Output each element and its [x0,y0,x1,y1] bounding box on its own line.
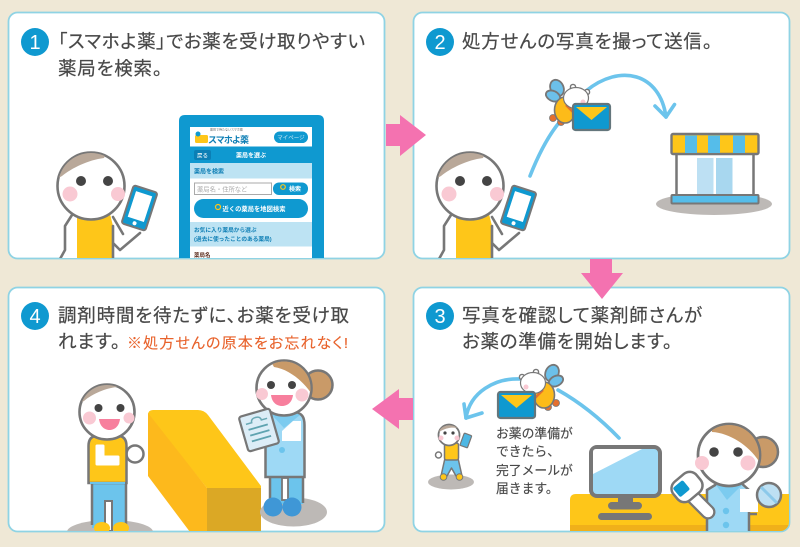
counter [148,410,261,532]
warning note: ※処方せんの原本をお忘れなく! [127,335,348,352]
step number 4 [21,302,49,330]
step number 2 [426,28,454,56]
step number 3 [426,302,454,330]
panel 4: receive medicine: れます。 [58,331,120,352]
arrow: step 2 to 3 [581,259,623,299]
step number 2: 2 [434,32,446,54]
panel 1: search pharmacy [8,12,384,260]
pharmacy building [656,134,772,215]
step number 1 [21,28,49,56]
heading 1: 「スマホよ薬」でお薬を受け取りやすい [58,31,365,52]
smartphone screen mockup: (過去に使ったことのある薬局) [194,235,272,243]
heading 3: 写真を確認して薬剤師さんが [462,305,702,326]
smartphone screen mockup: 近くの薬局を地図検索 [223,204,285,213]
person with smartphone [55,145,158,260]
computer monitor [591,447,660,520]
desk [570,494,790,532]
smartphone screen mockup: 薬局を検索 [194,168,224,176]
bee carrying envelope [519,363,565,410]
envelope [498,392,535,418]
panel 2: send prescription photo [414,12,790,260]
logo [195,128,249,144]
envelope [573,104,610,130]
arrow curve to pharmacy [530,75,674,176]
panel 4: receive medicine [8,288,384,544]
heading 2: 処方せんの写真を撮って送信。 [462,31,712,52]
logo: 薬局で待たないスマホ薬 [210,126,243,132]
arrow: step 3 to 4 [372,389,413,429]
smartphone screen mockup [179,115,324,259]
smartphone screen mockup: 薬局名 [194,251,211,259]
smartphone screen mockup: 戻る [197,152,208,160]
heading 1: 薬局を検索。 [58,58,162,79]
smartphone screen mockup: 薬局名・住所など [197,184,248,194]
step number 4: 4 [29,306,41,328]
person with smartphone [434,145,537,260]
small patient figure [428,424,474,490]
patient smiling [67,383,153,531]
clipboard [239,408,279,452]
panel 3: pharmacist confirms [414,288,790,535]
mail notification text: 届きます。 [496,481,559,496]
arrow curve to patient [464,379,619,438]
smartphone screen mockup: マイページ [277,134,305,142]
logo: スマホよ薬 [208,134,249,145]
arrow: step 1 to 2 [386,115,426,156]
step number 1: 1 [29,32,41,54]
mail notification text: 完了メールが [496,463,573,478]
pharmacist [668,420,781,535]
step number 3: 3 [434,306,446,328]
smartphone screen mockup: 検索 [289,185,301,193]
pharmacist smiling [239,360,332,526]
smartphone screen mockup: お気に入り薬局から選ぶ [194,226,257,234]
bee carrying envelope [544,78,590,126]
mail notification text: できたら、 [496,444,560,459]
heading 3: お薬の準備を開始します。 [462,331,672,352]
heading 4: 調剤時間を待たずに、お薬を受け取 [58,305,349,326]
smartphone screen mockup: 薬局を選ぶ [236,152,266,160]
mail notification text: お薬の準備が [496,426,573,441]
